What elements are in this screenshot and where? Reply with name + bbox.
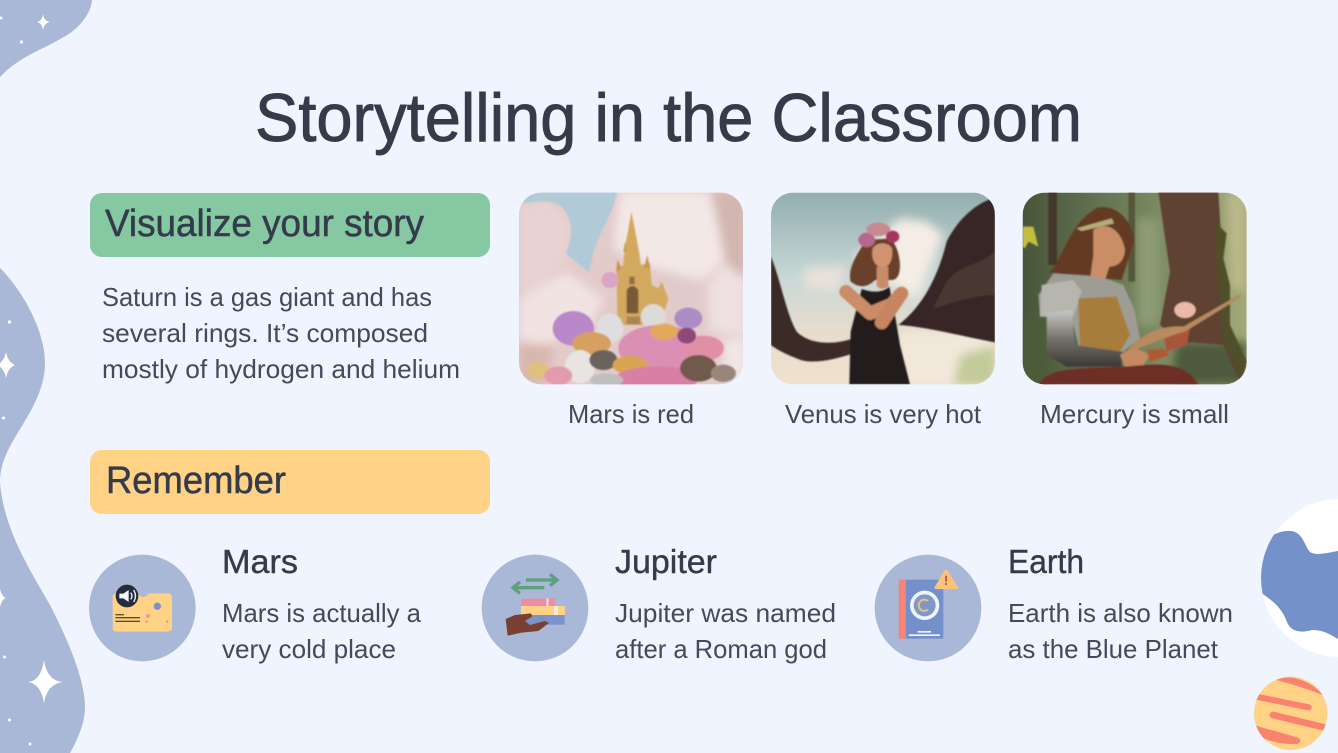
Jupiter heading and text bbox=[615, 543, 836, 664]
image: fairytale castle on flowers bbox=[519, 192, 747, 392]
rose bbox=[1174, 302, 1196, 318]
text block: Saturn description bbox=[102, 282, 460, 384]
castle tower bbox=[617, 212, 668, 325]
Mars heading and text: Mars bbox=[222, 543, 298, 580]
title: Storytelling in the Classroom bbox=[255, 80, 1082, 156]
decorative top-left wave with stars bbox=[0, 0, 92, 77]
Earth heading and text: Earth bbox=[1008, 543, 1084, 580]
hand bbox=[1120, 347, 1150, 367]
text block: Saturn description: mostly of hydrogen and helium bbox=[102, 354, 460, 384]
hair bbox=[850, 238, 900, 286]
Earth heading and text: as the Blue Planet bbox=[1008, 634, 1219, 664]
caption: Venus is very hot: Venus is very hot bbox=[785, 399, 982, 429]
Earth heading and text bbox=[1008, 543, 1233, 664]
icon: copyright book with warning sign bbox=[875, 555, 981, 661]
dress bbox=[1038, 365, 1198, 384]
caption: Mercury is small: Mercury is small bbox=[1040, 399, 1229, 429]
armor bbox=[1038, 273, 1140, 352]
flowers bbox=[601, 272, 619, 288]
text block: Saturn description: Saturn is a gas giant and has bbox=[102, 282, 432, 312]
caption: Mars is red: Mars is red bbox=[568, 399, 694, 429]
icon: map with audio speaker bbox=[89, 555, 196, 661]
trees bbox=[1158, 192, 1247, 382]
face bbox=[872, 243, 892, 268]
Mars heading and text: very cold place bbox=[222, 634, 396, 664]
heading bar: Remember: Remember bbox=[106, 460, 286, 502]
decorative planet: striped bbox=[1251, 677, 1330, 750]
decorative planet: earth bbox=[1255, 499, 1338, 657]
Mars heading and text: Mars is actually a bbox=[222, 598, 422, 628]
icon: hand holding books with exchange arrows bbox=[482, 555, 588, 661]
Mars heading and text bbox=[222, 543, 422, 664]
Jupiter heading and text: Jupiter bbox=[615, 543, 717, 580]
arms bbox=[846, 292, 902, 313]
face bbox=[1090, 226, 1125, 280]
book bbox=[1130, 293, 1242, 350]
text block: Saturn description: several rings. It’s composed bbox=[102, 318, 428, 348]
heading bar: Remember bbox=[90, 450, 490, 514]
decorative left wave with stars bbox=[0, 268, 85, 753]
Jupiter heading and text: after a Roman god bbox=[615, 634, 827, 664]
hair bbox=[1049, 207, 1134, 280]
cloth bbox=[771, 257, 853, 361]
Jupiter heading and text: Jupiter was named bbox=[615, 598, 836, 628]
dress bbox=[849, 287, 910, 384]
image: armored woman reading a book in forest bbox=[1023, 192, 1247, 385]
heading bar: Visualize your story: Visualize your story bbox=[105, 203, 424, 245]
heading bar: Visualize your story bbox=[90, 193, 490, 257]
flower crown bbox=[858, 233, 875, 247]
image: woman with flower crown and flowing cloth bbox=[771, 193, 995, 385]
Earth heading and text: Earth is also known bbox=[1008, 598, 1233, 628]
